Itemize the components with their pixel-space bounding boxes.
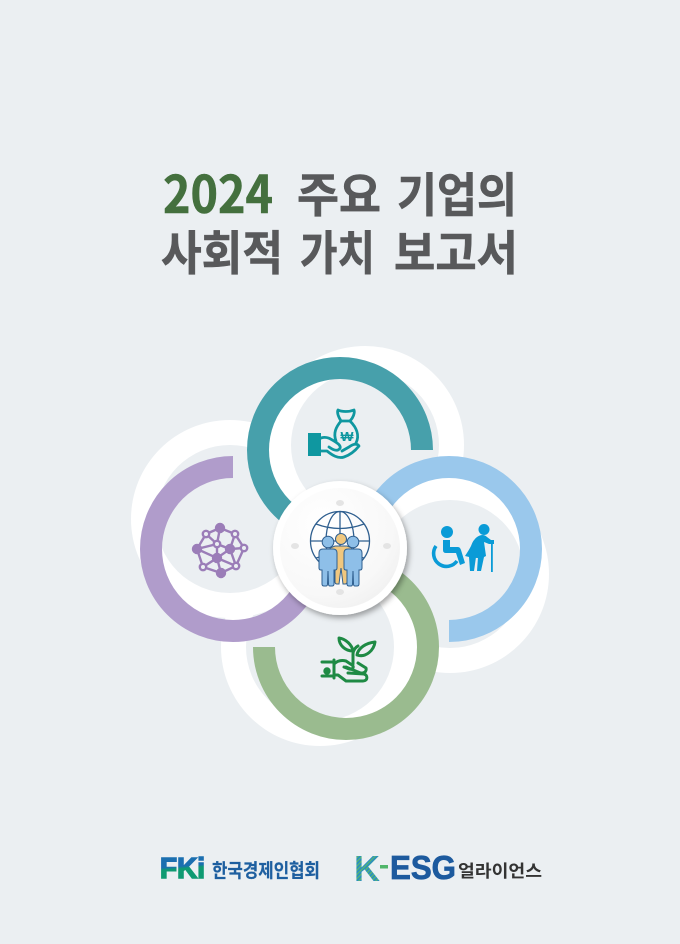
logo: K-ESG alliance: 얼라이언스: [458, 857, 542, 882]
title: 주요: [297, 157, 381, 226]
white rings behind the arcs: [131, 346, 549, 746]
icon: right blue person: [344, 536, 362, 586]
title: 보고서: [394, 215, 518, 284]
icon: hand holding sprout: [322, 638, 375, 681]
arc: purple: [151, 467, 315, 631]
disc: [273, 481, 407, 615]
title: 2024: [163, 153, 273, 228]
icon: network of nodes: [193, 524, 247, 577]
icon: globe: [310, 512, 370, 570]
logo: FKI: 한국경제인협회: [212, 856, 320, 883]
arc: teal: [258, 368, 422, 532]
title: 사회적: [161, 215, 283, 284]
icon: yellow person: [330, 534, 352, 584]
icon: hand holding money bag: [308, 410, 359, 458]
title: 기업의: [397, 157, 517, 226]
arc: light blue: [367, 467, 531, 631]
logo: K-ESG alliance: ESG: [390, 849, 456, 886]
logo: K-ESG alliance: [354, 848, 542, 889]
icon: hand holding money bag: ₩: [340, 429, 354, 444]
arc: green: [264, 565, 428, 729]
icon: left blue person: [319, 536, 337, 586]
logo: FKI: FKi: [160, 853, 205, 885]
logo: K-ESG alliance: K: [354, 848, 380, 889]
title: 가치: [300, 215, 375, 284]
center disc with globe and people: [273, 481, 407, 615]
icon: wheelchair user and elderly person: [434, 524, 494, 572]
title: [161, 153, 518, 284]
logo: FKI: [160, 853, 320, 885]
